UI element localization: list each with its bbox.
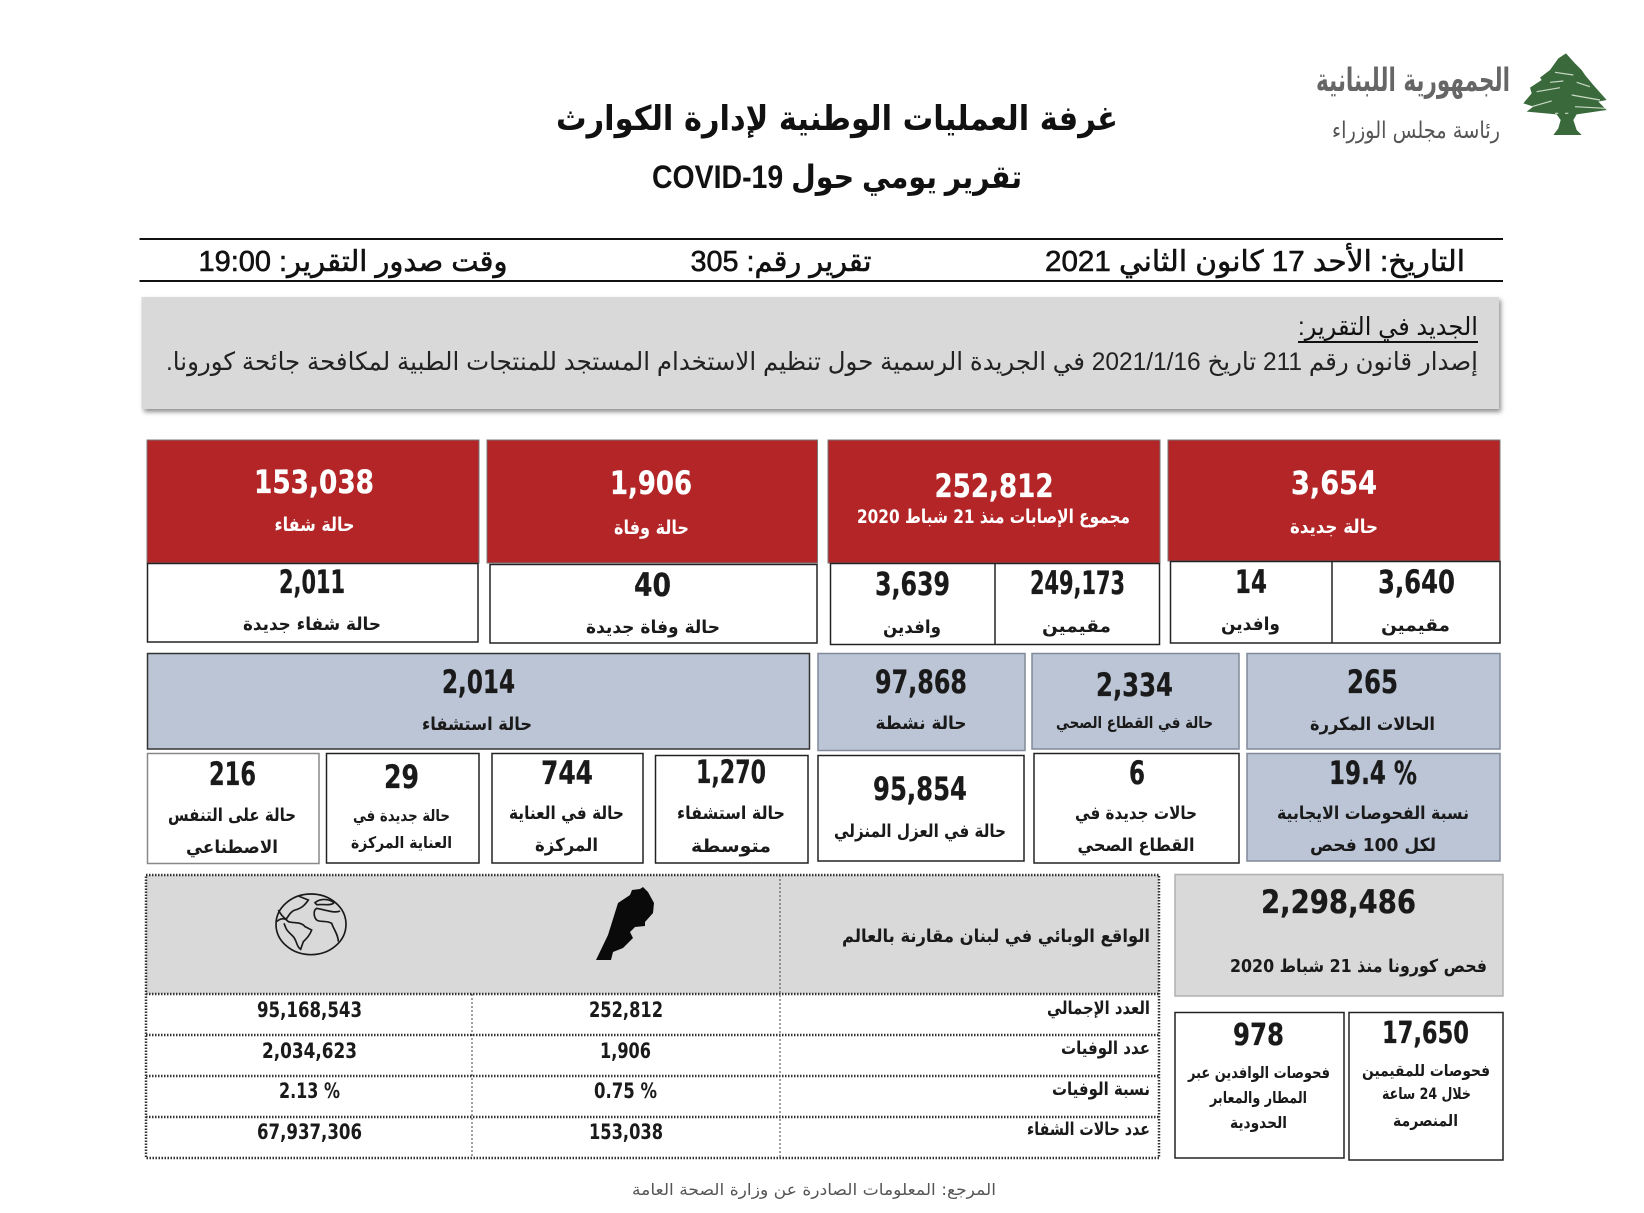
row: total cases — [257, 998, 1150, 1022]
panel: repeated cases — [1247, 654, 1500, 749]
panel: ventilator cases: حالة على التنفس — [168, 805, 296, 826]
panel: active cases: 97,868 — [875, 663, 967, 701]
panel: new cases — [1168, 440, 1500, 643]
panel: arrivals tests — [1175, 1012, 1344, 1158]
panel: recoveries: حالة شفاء جديدة — [243, 614, 381, 635]
news body: إصدار قانون رقم 211 تاريخ 2021/1/16 في الجريدة الرسمية حول تنظيم الاستخدام المستجد للمنتجات الطبية لمكافحة جائحة كورونا. — [166, 348, 1478, 377]
panel: total infections: مقيمين — [1042, 616, 1111, 637]
panel: new ICU cases: حالة جديدة في — [353, 806, 450, 826]
panel: ICU cases: المركزة — [535, 835, 598, 856]
panel: recoveries: 153,038 — [254, 463, 374, 501]
row: total cases: 95,168,543 — [257, 998, 362, 1022]
row: recoveries: 153,038 — [589, 1120, 663, 1144]
panel: total infections: 252,812 — [934, 467, 1054, 505]
panel: home isolation: حالة في العزل المنزلي — [834, 821, 1006, 842]
panel: ICU cases: حالة في العناية — [509, 803, 624, 824]
row: death rate: نسبة الوفيات — [1052, 1079, 1150, 1100]
panel: deaths — [487, 440, 818, 643]
panel: total infections: مجموع الإصابات منذ 21 شباط 2020 — [857, 506, 1130, 528]
row: deaths: 1,906 — [600, 1039, 651, 1063]
panel: ICU cases: 744 — [541, 754, 593, 792]
panel: new health sector cases: القطاع الصحي — [1078, 835, 1194, 856]
panel: news in the report — [142, 297, 1501, 412]
icon: cedar tree — [1523, 53, 1607, 135]
panel: active cases — [818, 654, 1025, 750]
panel: arrivals tests: الحدودية — [1230, 1113, 1287, 1132]
panel: moderate hospital cases: حالة استشفاء — [677, 803, 785, 824]
panel: ventilator cases: 216 — [209, 755, 256, 793]
panel: recoveries: 2,011 — [279, 563, 345, 601]
panel: recoveries — [147, 440, 479, 642]
row: deaths: 2,034,623 — [262, 1039, 357, 1063]
panel: resident tests: 17,650 — [1382, 1016, 1469, 1051]
panel: home isolation — [818, 756, 1024, 861]
panel: new cases: مقيمين — [1381, 615, 1450, 636]
panel: repeated cases: 265 — [1347, 663, 1398, 701]
row: recoveries: عدد حالات الشفاء — [1027, 1119, 1150, 1140]
panel: total infections: وافدين — [883, 617, 941, 638]
panel: positivity rate: 19.4 % — [1329, 754, 1417, 792]
panel: moderate hospital cases — [656, 753, 808, 863]
logo: Lebanese Republic cedar emblem — [1316, 53, 1607, 144]
panel: deaths: حالة وفاة جديدة — [586, 617, 720, 638]
row: total cases: 252,812 — [589, 998, 663, 1022]
panel: resident tests — [1349, 1012, 1503, 1160]
panel: hospitalised — [148, 654, 810, 749]
panel: new cases: حالة جديدة — [1290, 516, 1378, 538]
row: death rate: 0.75 % — [594, 1079, 657, 1103]
panel: Lebanon vs world comparison table — [146, 875, 1159, 1158]
panel: total infections — [828, 440, 1160, 645]
subtitle: تقرير يومي حول COVID-19 — [652, 159, 1022, 196]
panel: resident tests: فحوصات للمقيمين — [1362, 1061, 1490, 1080]
row: total cases: العدد الإجمالي — [1047, 998, 1150, 1019]
panel: total tests: فحص كورونا منذ 21 شباط 2020 — [1230, 956, 1487, 977]
panel: moderate hospital cases: 1,270 — [696, 753, 766, 791]
panel: arrivals tests: 978 — [1233, 1018, 1284, 1053]
panel: arrivals tests: المطار والمعابر — [1209, 1088, 1307, 1107]
panel: hospitalised: 2,014 — [442, 663, 515, 701]
panel: ventilator cases: الاصطناعي — [186, 837, 278, 858]
panel: new cases: 3,640 — [1378, 563, 1455, 601]
panel: hospitalised: حالة استشفاء — [422, 714, 532, 735]
panel: health sector cases — [1032, 654, 1239, 749]
title: غرفة العمليات الوطنية لإدارة الكوارث — [556, 99, 1118, 139]
panel: recoveries: حالة شفاء — [274, 514, 354, 536]
news heading: الجديد في التقرير: — [1298, 313, 1478, 341]
row: deaths: عدد الوفيات — [1061, 1038, 1150, 1059]
panel: total infections: 249,173 — [1030, 564, 1125, 602]
panel: resident tests: المنصرمة — [1393, 1111, 1458, 1130]
panel: deaths: حالة وفاة — [614, 517, 689, 539]
row: death rate — [279, 1079, 1150, 1103]
panel: health sector cases: 2,334 — [1096, 666, 1173, 704]
panel: positivity rate: لكل 100 فحص — [1310, 835, 1436, 856]
icon: Lebanon map — [596, 887, 654, 960]
report number: تقرير رقم: 305 — [690, 246, 872, 279]
row: deaths — [262, 1038, 1150, 1063]
row: recoveries — [257, 1119, 1150, 1144]
panel: home isolation: 95,854 — [873, 770, 967, 808]
panel: health sector cases: حالة في القطاع الصحي — [1056, 713, 1213, 733]
panel: arrivals tests: فحوصات الوافدين عبر — [1187, 1063, 1330, 1082]
panel: new ICU cases: 29 — [384, 758, 419, 796]
logo text: republic: الجمهورية اللبنانية — [1316, 61, 1510, 99]
panel: new ICU cases — [326, 754, 479, 863]
panel: positivity rate: نسبة الفحوصات الايجابية — [1277, 803, 1469, 824]
panel: total infections: 3,639 — [875, 565, 950, 603]
panel: new cases: وافدين — [1221, 614, 1280, 635]
panel: active cases: حالة نشطة — [876, 713, 966, 734]
panel: repeated cases: الحالات المكررة — [1310, 714, 1435, 735]
panel: new ICU cases: العناية المركزة — [351, 833, 452, 852]
row: death rate: 2.13 % — [279, 1079, 340, 1103]
panel: deaths: 1,906 — [610, 464, 692, 502]
logo text: presidency: رئاسة مجلس الوزراء — [1332, 118, 1500, 144]
panel: deaths: 40 — [634, 566, 671, 604]
report date: التاريخ: الأحد 17 كانون الثاني 2021 — [1045, 242, 1465, 279]
panel: total tests — [1175, 874, 1503, 996]
panel: positivity rate — [1247, 754, 1500, 861]
panel: ICU cases — [492, 754, 643, 863]
panel: moderate hospital cases: متوسطة — [691, 836, 771, 857]
panel: ventilator cases — [148, 754, 319, 864]
panel: new cases: 14 — [1235, 563, 1267, 601]
table heading: الواقع الوبائي في لبنان مقارنة بالعالم — [842, 926, 1150, 947]
source footer: المرجع: المعلومات الصادرة عن وزارة الصحة العامة — [632, 1180, 996, 1200]
panel: resident tests: خلال 24 ساعة — [1382, 1084, 1471, 1103]
panel: new health sector cases — [1034, 754, 1239, 863]
report time: وقت صدور التقرير: 19:00 — [198, 246, 508, 278]
row: recoveries: 67,937,306 — [257, 1120, 362, 1144]
panel: new cases: 3,654 — [1291, 464, 1377, 502]
panel: total tests: 2,298,486 — [1261, 883, 1416, 921]
panel: new health sector cases: حالات جديدة في — [1075, 803, 1197, 824]
panel: new health sector cases: 6 — [1129, 754, 1145, 792]
icon: globe — [276, 894, 346, 955]
